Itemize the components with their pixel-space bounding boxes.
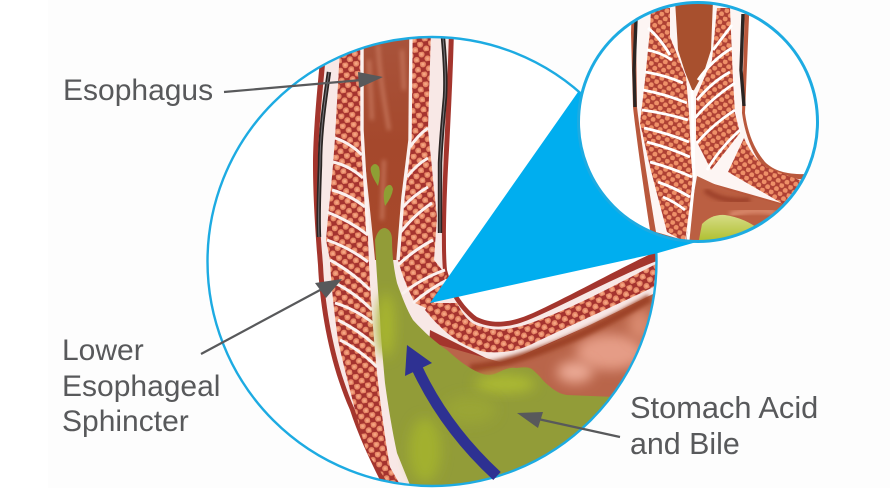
magnified acid xyxy=(699,214,754,240)
magnified stomach interior xyxy=(686,176,715,240)
magnified separators xyxy=(642,25,740,240)
label: Lower Esophageal Sphincter: Lower xyxy=(62,334,144,367)
label: Lower Esophageal Sphincter: Sphincter xyxy=(62,405,189,438)
black outer bands xyxy=(319,38,445,237)
label: Stomach Acid and Bile: Stomach Acid xyxy=(630,390,818,425)
panel: main cross-section circle xyxy=(208,30,670,488)
main circle outline xyxy=(208,37,656,486)
white connective tissue xyxy=(318,30,665,488)
magnified stomach muscle xyxy=(728,138,802,204)
label: Lower Esophageal Sphincter: Esophageal xyxy=(62,370,220,403)
magnified left muscle xyxy=(640,8,693,242)
acid droplets xyxy=(371,164,393,206)
magnified black bands xyxy=(634,14,744,107)
label: Stomach Acid and Bile xyxy=(630,390,818,461)
arrow: esophagus pointer xyxy=(224,72,383,92)
arrow: sphincter pointer xyxy=(201,279,342,354)
arrow: acid reflux direction xyxy=(405,345,497,476)
esophagus lumen xyxy=(362,30,411,260)
label: Lower Esophageal Sphincter xyxy=(62,334,220,438)
arrow: stomach acid pointer xyxy=(517,412,620,437)
icon: blue magnification wedge xyxy=(430,92,700,303)
right muscle band xyxy=(398,30,447,310)
magnified lumen xyxy=(675,0,713,92)
left muscle band xyxy=(326,50,399,482)
magnified outer wall xyxy=(631,14,804,238)
magnified right muscle xyxy=(696,8,740,170)
magnified white tissue xyxy=(636,0,810,245)
white muscle separators xyxy=(327,30,447,367)
esophagus and stomach outer wall xyxy=(313,30,670,488)
stomach acid and bile xyxy=(375,228,615,488)
panel: magnified sphincter circle xyxy=(578,0,818,245)
label: Stomach Acid and Bile: and Bile xyxy=(630,427,740,461)
magnified circle outline xyxy=(578,2,818,242)
stomach muscle band xyxy=(425,262,660,352)
stomach interior xyxy=(440,292,653,397)
label: Esophagus: Esophagus xyxy=(63,74,213,107)
